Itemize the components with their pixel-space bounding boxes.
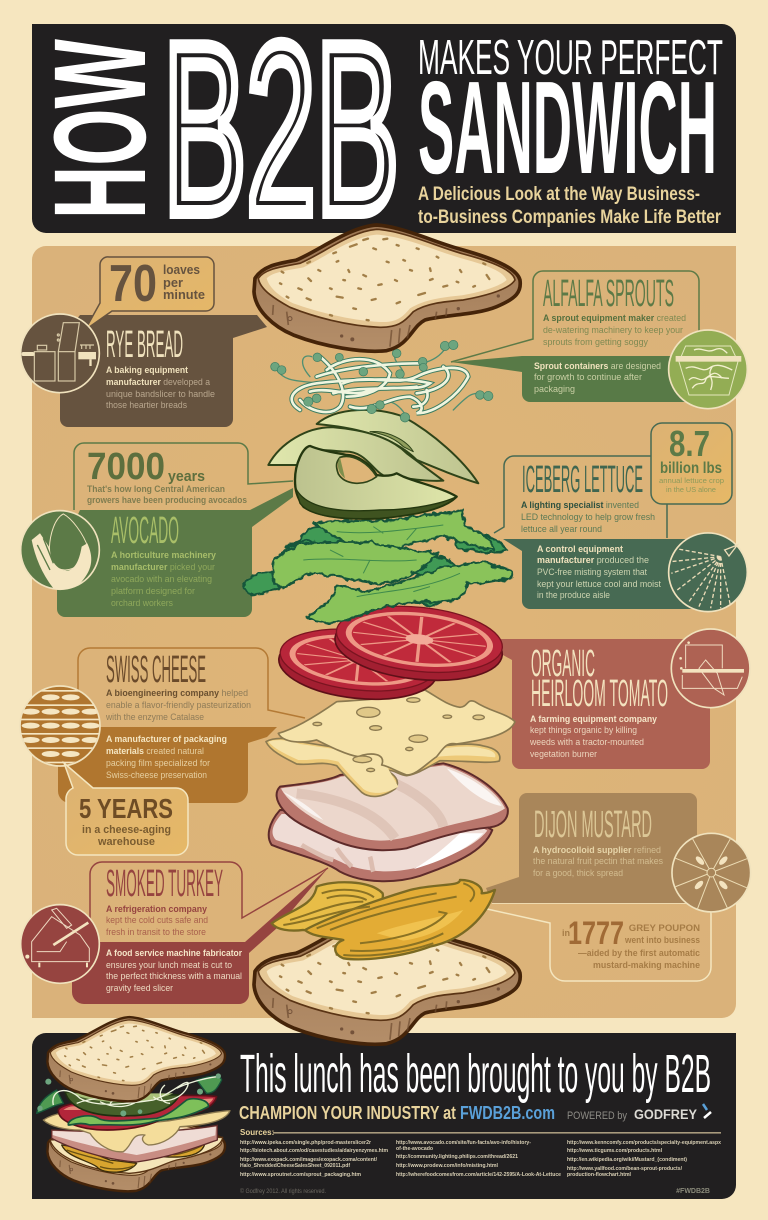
- icon: bandslicer machine: [21, 314, 99, 393]
- icon: sprout container: [669, 330, 747, 409]
- text block: hydrocolloid: for a good, thick spread: [533, 867, 623, 878]
- callout: 1777 grey poupon: in: [562, 928, 570, 938]
- text block: tomato: A farming equipment company: [530, 713, 658, 724]
- callout: 8.7 billion lbs: [651, 423, 732, 504]
- title word: B2B inline lettering: B2B: [163, 0, 399, 264]
- panel: rye bread: RYE BREAD: [106, 324, 183, 366]
- text block: avocado: manufacturer picked your: [111, 561, 215, 572]
- text block: lighting specialist: lettuce all year round: [521, 523, 602, 534]
- powered by godfrey: POWERED by: [567, 1110, 627, 1122]
- illustration: exploded sandwich: [243, 225, 520, 1044]
- cheese slices: [266, 690, 515, 796]
- text block: avocado: avocado with an elevating: [111, 573, 212, 584]
- subtitle: [418, 184, 721, 228]
- mini mustard: [62, 1143, 205, 1172]
- panel: food service machine: the perfect thickness with a manual: [106, 970, 242, 981]
- panel: sprout containers: packaging: [534, 383, 575, 394]
- illustration: assembled sandwich: [37, 1017, 230, 1191]
- panel: control equipment: manufacturer produced the: [537, 554, 649, 565]
- sources: http://www.ticgums.com/products.html: [567, 1148, 662, 1154]
- panel: swiss cheese outline: SWISS CHEESE: [106, 649, 206, 691]
- callout: 7000 years: [74, 443, 293, 510]
- panel: control equipment: kept your lettuce cool and moist: [537, 578, 661, 589]
- icon: tractor-mounted burner: [671, 629, 750, 708]
- text block: lighting specialist: LED technology to help grow fresh: [521, 511, 655, 522]
- callout: 1777 grey poupon: 1777: [568, 915, 624, 951]
- text block: lighting specialist: A lighting specialist invented: [521, 499, 639, 510]
- panel: packaging materials: Swiss-cheese preservation: [106, 769, 207, 780]
- callout: 8.7 billion lbs: annual lettuce crop: [659, 476, 724, 485]
- text block: refrigeration: [106, 903, 208, 937]
- powered by godfrey: [567, 1104, 711, 1122]
- sources: http://www.yallfood.com/bean-sprout-products/: [567, 1166, 682, 1172]
- panel: food service machine: gravity feed slicer: [106, 982, 173, 993]
- bottom bread: [254, 918, 520, 1044]
- turkey slices: [269, 763, 508, 881]
- text block: avocado: platform designed for: [111, 585, 195, 596]
- panel: food service machine: A food service machine fabricator: [106, 947, 242, 958]
- sources: http://en.wikipedia.org/wiki/Mustard_(condiment): [567, 1157, 687, 1163]
- icon: cheese holes: [20, 686, 100, 766]
- sources: http://biotech.about.com/od/casestudies/a/dairyenzymes.htm: [240, 1148, 388, 1154]
- mini cheese: [43, 1111, 230, 1152]
- text block: refrigeration: kept the cold cuts safe and: [106, 914, 208, 925]
- panel: sprout containers: Sprout containers are designed: [534, 360, 661, 371]
- callout: 1777 grey poupon: went into business: [624, 935, 700, 946]
- sources: production-flowchart.html: [567, 1172, 631, 1178]
- text block: hydrocolloid: A hydrocolloid supplier refined: [533, 844, 661, 855]
- callout: 7000 years: That's how long Central American: [87, 483, 225, 494]
- callout: 70 loaves per minute: per: [163, 276, 183, 290]
- mini bread surface: [50, 1137, 223, 1173]
- panel: avocado: AVOCADO: [111, 510, 179, 552]
- text block: tomato: kept things organic by killing: [530, 724, 637, 735]
- panel: dijon mustard: [486, 793, 697, 903]
- callout: 70 loaves per minute: [85, 255, 214, 330]
- text block: avocado: orchard workers: [111, 597, 173, 608]
- text block: bioengineering: A bioengineering company helped: [106, 687, 248, 698]
- top bread: [254, 225, 520, 351]
- callout: 70 loaves per minute: loaves: [163, 263, 200, 277]
- panel: swiss cheese outline: [78, 648, 305, 730]
- panel: iceberg lettuce outline: [494, 456, 667, 538]
- text block: refrigeration: A refrigeration company: [106, 903, 208, 914]
- panel: food service machine: ensures your lunch meat is cut to: [106, 959, 232, 970]
- sources: of-the-avocado: [396, 1146, 434, 1152]
- call to action: CHAMPION YOUR INDUSTRY at FWDB2B.com: [239, 1103, 555, 1123]
- icon: mustard seeds: [672, 833, 751, 912]
- panel: control equipment: [503, 539, 694, 609]
- sources: http://wherefoodcomesfrom.com/article/142-2595/A-Look-At-Lettuce: [396, 1172, 561, 1178]
- text block: avocado: A horticulture machinery: [111, 549, 217, 560]
- sources: http://www.avocado.com/site/fun-facts/avo-info/history-: [396, 1140, 531, 1146]
- mini top bread: [47, 1017, 225, 1101]
- mini avocado: [65, 1092, 179, 1116]
- callout: 1777 grey poupon: GREY POUPON: [629, 923, 700, 934]
- mini sprouts: [53, 1077, 217, 1106]
- callout: 5 years: [64, 763, 188, 855]
- lettuce leaves: [243, 510, 513, 623]
- callout: 7000 years: 7000: [87, 446, 165, 488]
- callout: 7000 years: growers have been producing avocados: [87, 494, 247, 505]
- callout: 7000 years: years: [168, 468, 205, 485]
- tomato slices: [276, 599, 506, 706]
- panel: avocado: [57, 488, 293, 617]
- heading: organic heirloom tomato: ORGANIC: [531, 643, 595, 685]
- text block: rye bread: A baking equipment: [106, 364, 188, 375]
- panel: smoked turkey outline: SMOKED TURKEY: [106, 863, 223, 905]
- sources: Sources:: [240, 1128, 274, 1137]
- mustard: [272, 880, 495, 959]
- hashtag: #FWDB2B: [676, 1188, 710, 1195]
- text block: avocado: [111, 549, 217, 608]
- text block: tomato: weeds with a tractor-mounted: [529, 736, 644, 747]
- panel: packaging materials: packing film specialized for: [106, 757, 210, 768]
- sources: http://community.lighting.philips.com/thread/2621: [396, 1154, 518, 1160]
- mini lettuce: [68, 1099, 208, 1125]
- text block: bioengineering: enable a flavor-friendly pasteurization: [106, 699, 251, 710]
- panel: packaging materials: A manufacturer of packaging: [106, 733, 227, 744]
- panel: control equipment: A control equipment: [537, 543, 623, 554]
- mini turkey: [52, 1125, 217, 1162]
- subtitle: A Delicious Look at the Way Business-: [418, 184, 700, 205]
- mini tomato: [58, 1095, 217, 1130]
- callout: 8.7 billion lbs: billion lbs: [660, 460, 722, 477]
- callout: 5 years: in a cheese-aging: [82, 824, 171, 836]
- callout: 5 years: 5 YEARS: [79, 793, 173, 824]
- callout: 70 loaves per minute: 70: [109, 255, 157, 313]
- sources: http://www.kenncomfy.com/products/specialty-equipment.aspx: [567, 1140, 721, 1146]
- panel: sprout containers: for growth to continue after: [534, 371, 642, 382]
- alfalfa sprouts: [271, 340, 493, 422]
- text block: rye bread: unique bandslicer to handle: [106, 388, 215, 399]
- text block: tomato: [529, 713, 658, 759]
- sources: http://www.sproutnet.com/sprout_packaging.htm: [240, 1172, 361, 1178]
- text block: tomato: vegetation burner: [530, 748, 597, 759]
- text block: sprout equipment: de-watering machinery to keep your: [543, 324, 683, 335]
- mini bottom bread: [47, 1107, 225, 1191]
- callout: 70 loaves per minute: minute: [163, 288, 205, 302]
- powered by godfrey: GODFREY: [634, 1107, 697, 1122]
- text block: sprout equipment: A sprout equipment maker created: [543, 312, 686, 323]
- footer banner: [32, 1033, 736, 1199]
- callout: 1777 grey poupon: —aided by the first automatic: [578, 948, 701, 959]
- text block: hydrocolloid: the natural fruit pectin that makes: [533, 855, 663, 866]
- main kraft paper panel: [32, 246, 736, 1018]
- panel: control equipment: in the produce aisle: [537, 589, 610, 600]
- callout: 8.7 billion lbs: in the US alone: [666, 485, 716, 494]
- panel: packaging materials: [58, 727, 277, 803]
- sources: http://www.ipeka.com/single.php/prod-masterslicer2r: [240, 1140, 372, 1146]
- callout: 8.7 billion lbs: 8.7: [669, 423, 710, 464]
- panel: alfalfa sprouts outline: [451, 271, 699, 362]
- panel: smoked turkey outline: [90, 862, 328, 942]
- avocado slices: [268, 410, 478, 519]
- text block: sprout equipment: [543, 312, 686, 347]
- panel: sprout containers: [451, 356, 690, 402]
- icon: hand holding avocado: [21, 511, 99, 589]
- callout: 1777 grey poupon: [487, 903, 711, 981]
- text block: rye bread: manufacturer developed a: [106, 376, 211, 387]
- panel: food service machine: [72, 868, 328, 1004]
- text block: bioengineering: [105, 687, 251, 722]
- panel: packaging materials: materials created natural: [106, 745, 204, 756]
- text block: hydrocolloid: [533, 844, 663, 878]
- sources: http://www.prodew.com/info/misting.html: [396, 1163, 498, 1169]
- text block: bioengineering: with the enzyme Catalase: [105, 711, 204, 722]
- sources: Halo_ShreddedCheeseSalesSheet_092011.pdf: [240, 1163, 350, 1169]
- text block: sprout equipment: sprouts from getting soggy: [543, 336, 648, 347]
- callout: 5 years: warehouse: [97, 836, 155, 848]
- panel: organic heirloom tomato: [500, 639, 710, 769]
- icon: misting nozzle: [669, 533, 747, 612]
- panel: control equipment: PVC-free misting system that: [537, 566, 647, 577]
- text block: rye bread: [106, 364, 215, 410]
- text block: rye bread: those heartier breads: [106, 399, 187, 410]
- text block: lighting specialist: [521, 499, 655, 534]
- header banner: [26, 0, 736, 264]
- copyright: © Godfrey 2012. All rights reserved.: [240, 1188, 326, 1195]
- icon: gravity feed slicer: [21, 905, 99, 983]
- heading: organic heirloom tomato: [531, 643, 668, 715]
- sources: http://www.exopack.com/images/exopack.coma/content/: [240, 1157, 377, 1163]
- text block: refrigeration: fresh in transit to the store: [106, 926, 206, 937]
- panel: rye bread: [60, 315, 267, 427]
- sources: [240, 1128, 721, 1178]
- callout: 1777 grey poupon: mustard-making machine: [593, 960, 700, 971]
